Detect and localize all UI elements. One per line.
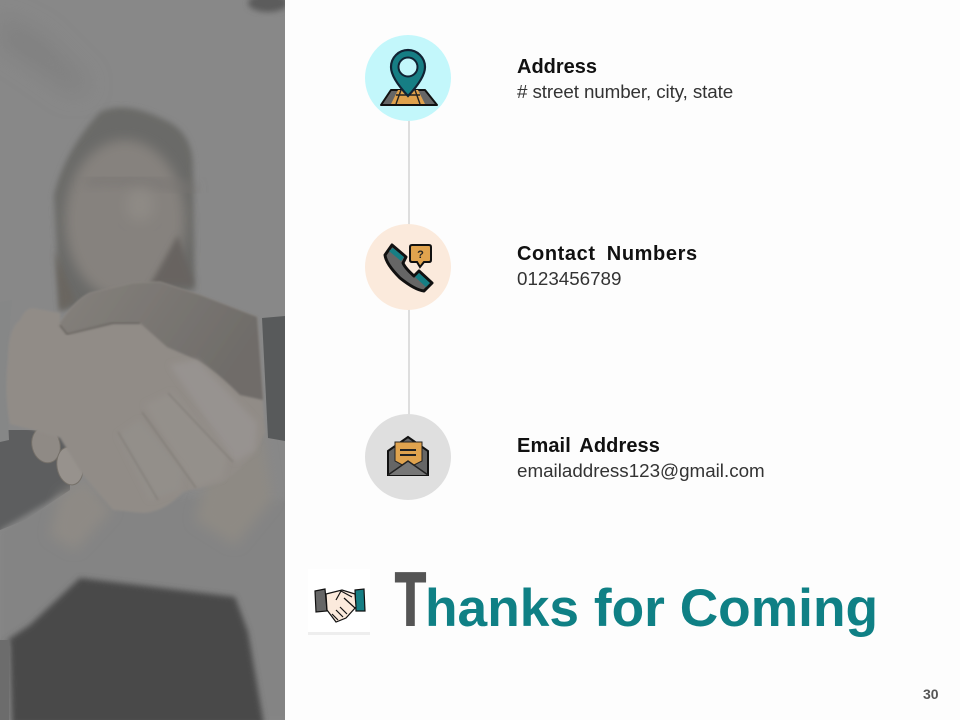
text: phone number: 0123456789: [517, 268, 621, 289]
heading: email address: Email Address: [517, 435, 660, 457]
right sleeve: [262, 316, 285, 441]
heading: address: Address: [517, 56, 597, 78]
icon: envelope: [365, 414, 451, 500]
thumb shading: [60, 282, 263, 400]
title: hanks for Coming: [425, 579, 878, 638]
panel: email address: [365, 414, 765, 500]
main hand: [6, 282, 265, 513]
light clothing: [0, 495, 300, 720]
woman head: [54, 108, 195, 310]
text: address detail: # street number, city, state: [517, 81, 733, 102]
panel: handshake photo: [0, 0, 285, 720]
finger highlights: [170, 360, 257, 462]
dark background left: [0, 430, 70, 530]
fingertips: [28, 424, 64, 466]
wrist warm tone: [195, 430, 272, 545]
text: email: emailaddress123@gmail.com: [517, 460, 765, 481]
heading: contact numbers: Contact Numbers: [517, 243, 698, 265]
icon: map pin: [365, 35, 451, 121]
dark jacket: [0, 578, 264, 720]
icon: phone: ?: [417, 249, 424, 261]
icon: phone: [365, 224, 451, 310]
panel: address: [365, 35, 733, 121]
sleeve left: [0, 300, 12, 442]
page number: 30: [923, 686, 939, 702]
timeline connector: [408, 120, 410, 430]
icon: handshake card: [308, 588, 370, 635]
panel: contact numbers: [365, 224, 698, 310]
title: [394, 560, 878, 641]
